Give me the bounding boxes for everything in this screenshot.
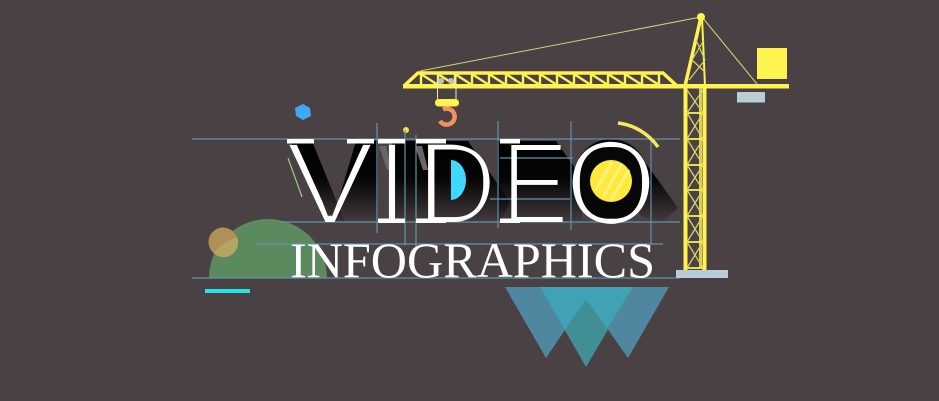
grey block <box>737 92 765 102</box>
counterweight <box>757 48 787 79</box>
title: VIDEO: O <box>565 115 657 251</box>
crane top pivot <box>697 13 705 21</box>
crane mast <box>685 17 705 86</box>
title: VIDEO: V <box>285 118 375 250</box>
yellow striped circle <box>590 160 632 202</box>
crane jib truss <box>404 73 677 86</box>
cyan bar <box>205 289 250 293</box>
green slash <box>288 158 302 197</box>
overlapping teal triangles <box>505 287 669 367</box>
title: VIDEO: D <box>417 118 497 250</box>
title: VIDEO <box>285 115 657 251</box>
hook assembly <box>435 75 459 125</box>
yellow dot <box>403 127 409 133</box>
crane tower <box>686 88 704 270</box>
grey highlight strips <box>379 146 428 170</box>
yellow arc <box>618 123 658 147</box>
green semicircle <box>209 219 327 278</box>
construction grid lines <box>192 121 680 278</box>
tan circle <box>208 228 238 257</box>
crane jib bar <box>403 84 789 88</box>
title: VIDEO: E <box>501 118 569 250</box>
letter shadows <box>290 141 678 225</box>
title: VIDEO: I <box>377 118 407 250</box>
crane cables <box>420 17 757 84</box>
blue half circle <box>451 160 466 200</box>
subtitle: INFOGRAPHICS: INFOGRAPHICS <box>290 232 655 288</box>
O interior <box>573 139 649 221</box>
crane <box>403 13 789 278</box>
crane base <box>676 270 728 278</box>
blue hexagon <box>295 104 311 120</box>
